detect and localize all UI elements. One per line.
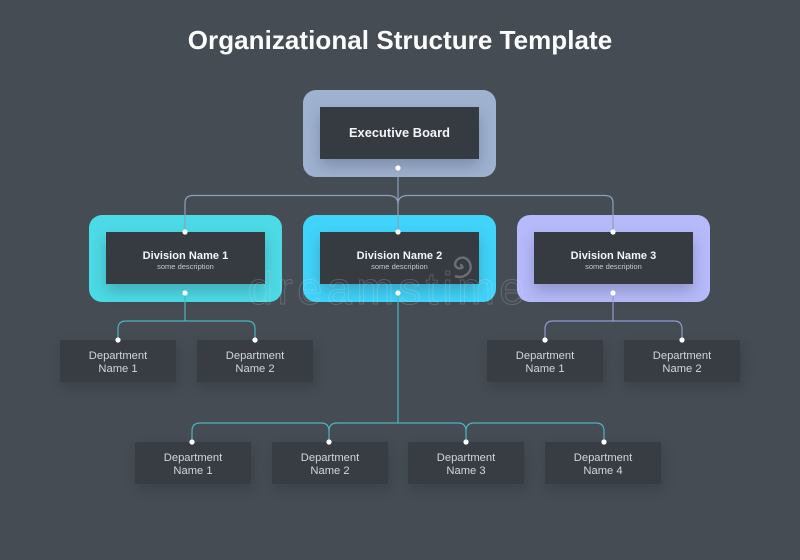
department: division 2, name 4: Department (574, 452, 632, 464)
department: division 3, name 2: Department (653, 350, 711, 362)
department: division 3, name 2 (624, 340, 740, 382)
panel: division 1 (89, 215, 282, 302)
department: division 1, name 2: Department (226, 350, 284, 362)
connector: division 3 to departments (545, 293, 682, 340)
box: executive board label: Executive Board (349, 125, 450, 140)
department: division 2, name 2: Department (301, 452, 359, 464)
department: division 1, name 2 (197, 340, 313, 382)
panel: division 3 (517, 215, 710, 302)
connector dots (115, 165, 685, 445)
connector: division 2 to departments (192, 293, 604, 442)
connector: board to divisions (185, 177, 613, 232)
department: division 2, name 3: Department (437, 452, 495, 464)
box: division 2 label (320, 232, 479, 284)
department: division 1, name 1: Name 1 (98, 363, 138, 375)
box: division 1 label (106, 232, 265, 284)
panel: division 2 (303, 215, 496, 302)
box: division 2 label: Division Name 2 (357, 250, 442, 262)
department: division 2, name 1: Name 1 (173, 465, 213, 477)
box: division 3 label: some description (585, 262, 642, 271)
department: division 3, name 1 (487, 340, 603, 382)
box: executive board label (320, 107, 479, 159)
department: division 2, name 4: Name 4 (583, 465, 623, 477)
department: division 1, name 1 (60, 340, 176, 382)
panel: executive board (303, 90, 496, 177)
box: division 1 label: Division Name 1 (143, 250, 228, 262)
department: division 3, name 1: Department (516, 350, 574, 362)
department: division 3, name 1: Name 1 (525, 363, 565, 375)
box: division 3 label (534, 232, 693, 284)
department: division 1, name 2: Name 2 (235, 363, 275, 375)
title: Organizational Structure Template (188, 25, 612, 55)
department: division 2, name 2 (272, 442, 388, 484)
box: division 1 label: some description (157, 262, 214, 271)
department: division 2, name 1 (135, 442, 251, 484)
department: division 1, name 1: Department (89, 350, 147, 362)
department: division 3, name 2: Name 2 (662, 363, 702, 375)
department: division 2, name 3: Name 3 (446, 465, 486, 477)
department: division 2, name 3 (408, 442, 524, 484)
box: division 3 label: Division Name 3 (571, 250, 656, 262)
connector: division 1 to departments (118, 293, 255, 340)
box: division 2 label: some description (371, 262, 428, 271)
department: division 2, name 2: Name 2 (310, 465, 350, 477)
department: division 2, name 1: Department (164, 452, 222, 464)
department: division 2, name 4 (545, 442, 661, 484)
